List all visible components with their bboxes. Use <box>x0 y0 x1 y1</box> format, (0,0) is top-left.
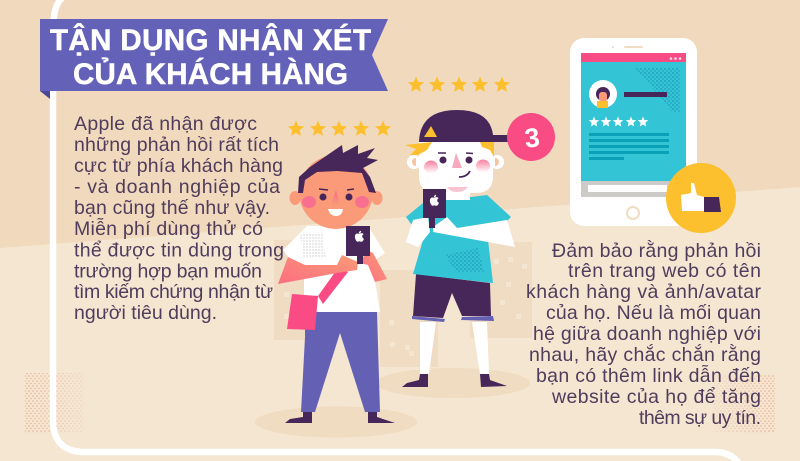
speckle texture bottom left <box>25 373 83 433</box>
right paragraph: website của họ để tăng <box>551 386 761 408</box>
right paragraph: của họ. Nếu là mối quan <box>546 302 761 324</box>
left paragraph: bạn cũng thế như vậy. <box>74 197 270 219</box>
right paragraph <box>526 239 762 429</box>
left paragraph: người tiêu dùng. <box>74 302 217 324</box>
right paragraph: hệ giữa doanh nghiệp với <box>533 323 761 345</box>
person one: boy with bag <box>255 145 417 438</box>
review avatar <box>589 80 617 108</box>
right paragraph: thêm sự uy tín. <box>639 407 761 429</box>
right paragraph: nhau, hãy chắc chắn rằng <box>529 343 761 366</box>
tablet with review <box>570 38 697 226</box>
number badge 3: 3 <box>523 122 541 154</box>
title <box>50 23 371 91</box>
title banner <box>40 19 388 99</box>
left paragraph: cực từ phía khách hàng <box>74 155 283 177</box>
title: CỦA KHÁCH HÀNG <box>73 57 348 91</box>
person two: boy in cap <box>376 110 530 398</box>
right paragraph: khách hàng và ảnh/avatar <box>526 281 762 303</box>
right paragraph: trên trang web có tên <box>568 260 761 282</box>
left paragraph: - và doanh nghiệp của <box>74 176 280 198</box>
left paragraph: những phản hồi rất tích <box>74 134 279 156</box>
right paragraph: Đảm bảo rằng phản hồi <box>552 239 761 262</box>
left paragraph <box>74 113 284 324</box>
stars above first person <box>288 120 391 136</box>
left paragraph: trường hợp bạn muốn <box>74 260 262 282</box>
left paragraph: thể được tin dùng trong <box>74 240 284 262</box>
left paragraph: Apple đã nhận được <box>74 113 257 135</box>
left paragraph: Miễn phí dùng thử có <box>74 217 263 240</box>
icon: thumbs up badge <box>666 163 736 233</box>
speckle texture bottom right <box>713 375 775 433</box>
title: TẬN DỤNG NHẬN XÉT <box>50 23 371 57</box>
left paragraph: tìm kiếm chứng nhận từ <box>74 281 273 303</box>
right paragraph: bạn có thêm link dẫn đến <box>536 364 761 387</box>
number badge 3 <box>507 113 555 161</box>
stars above second person <box>408 76 510 92</box>
